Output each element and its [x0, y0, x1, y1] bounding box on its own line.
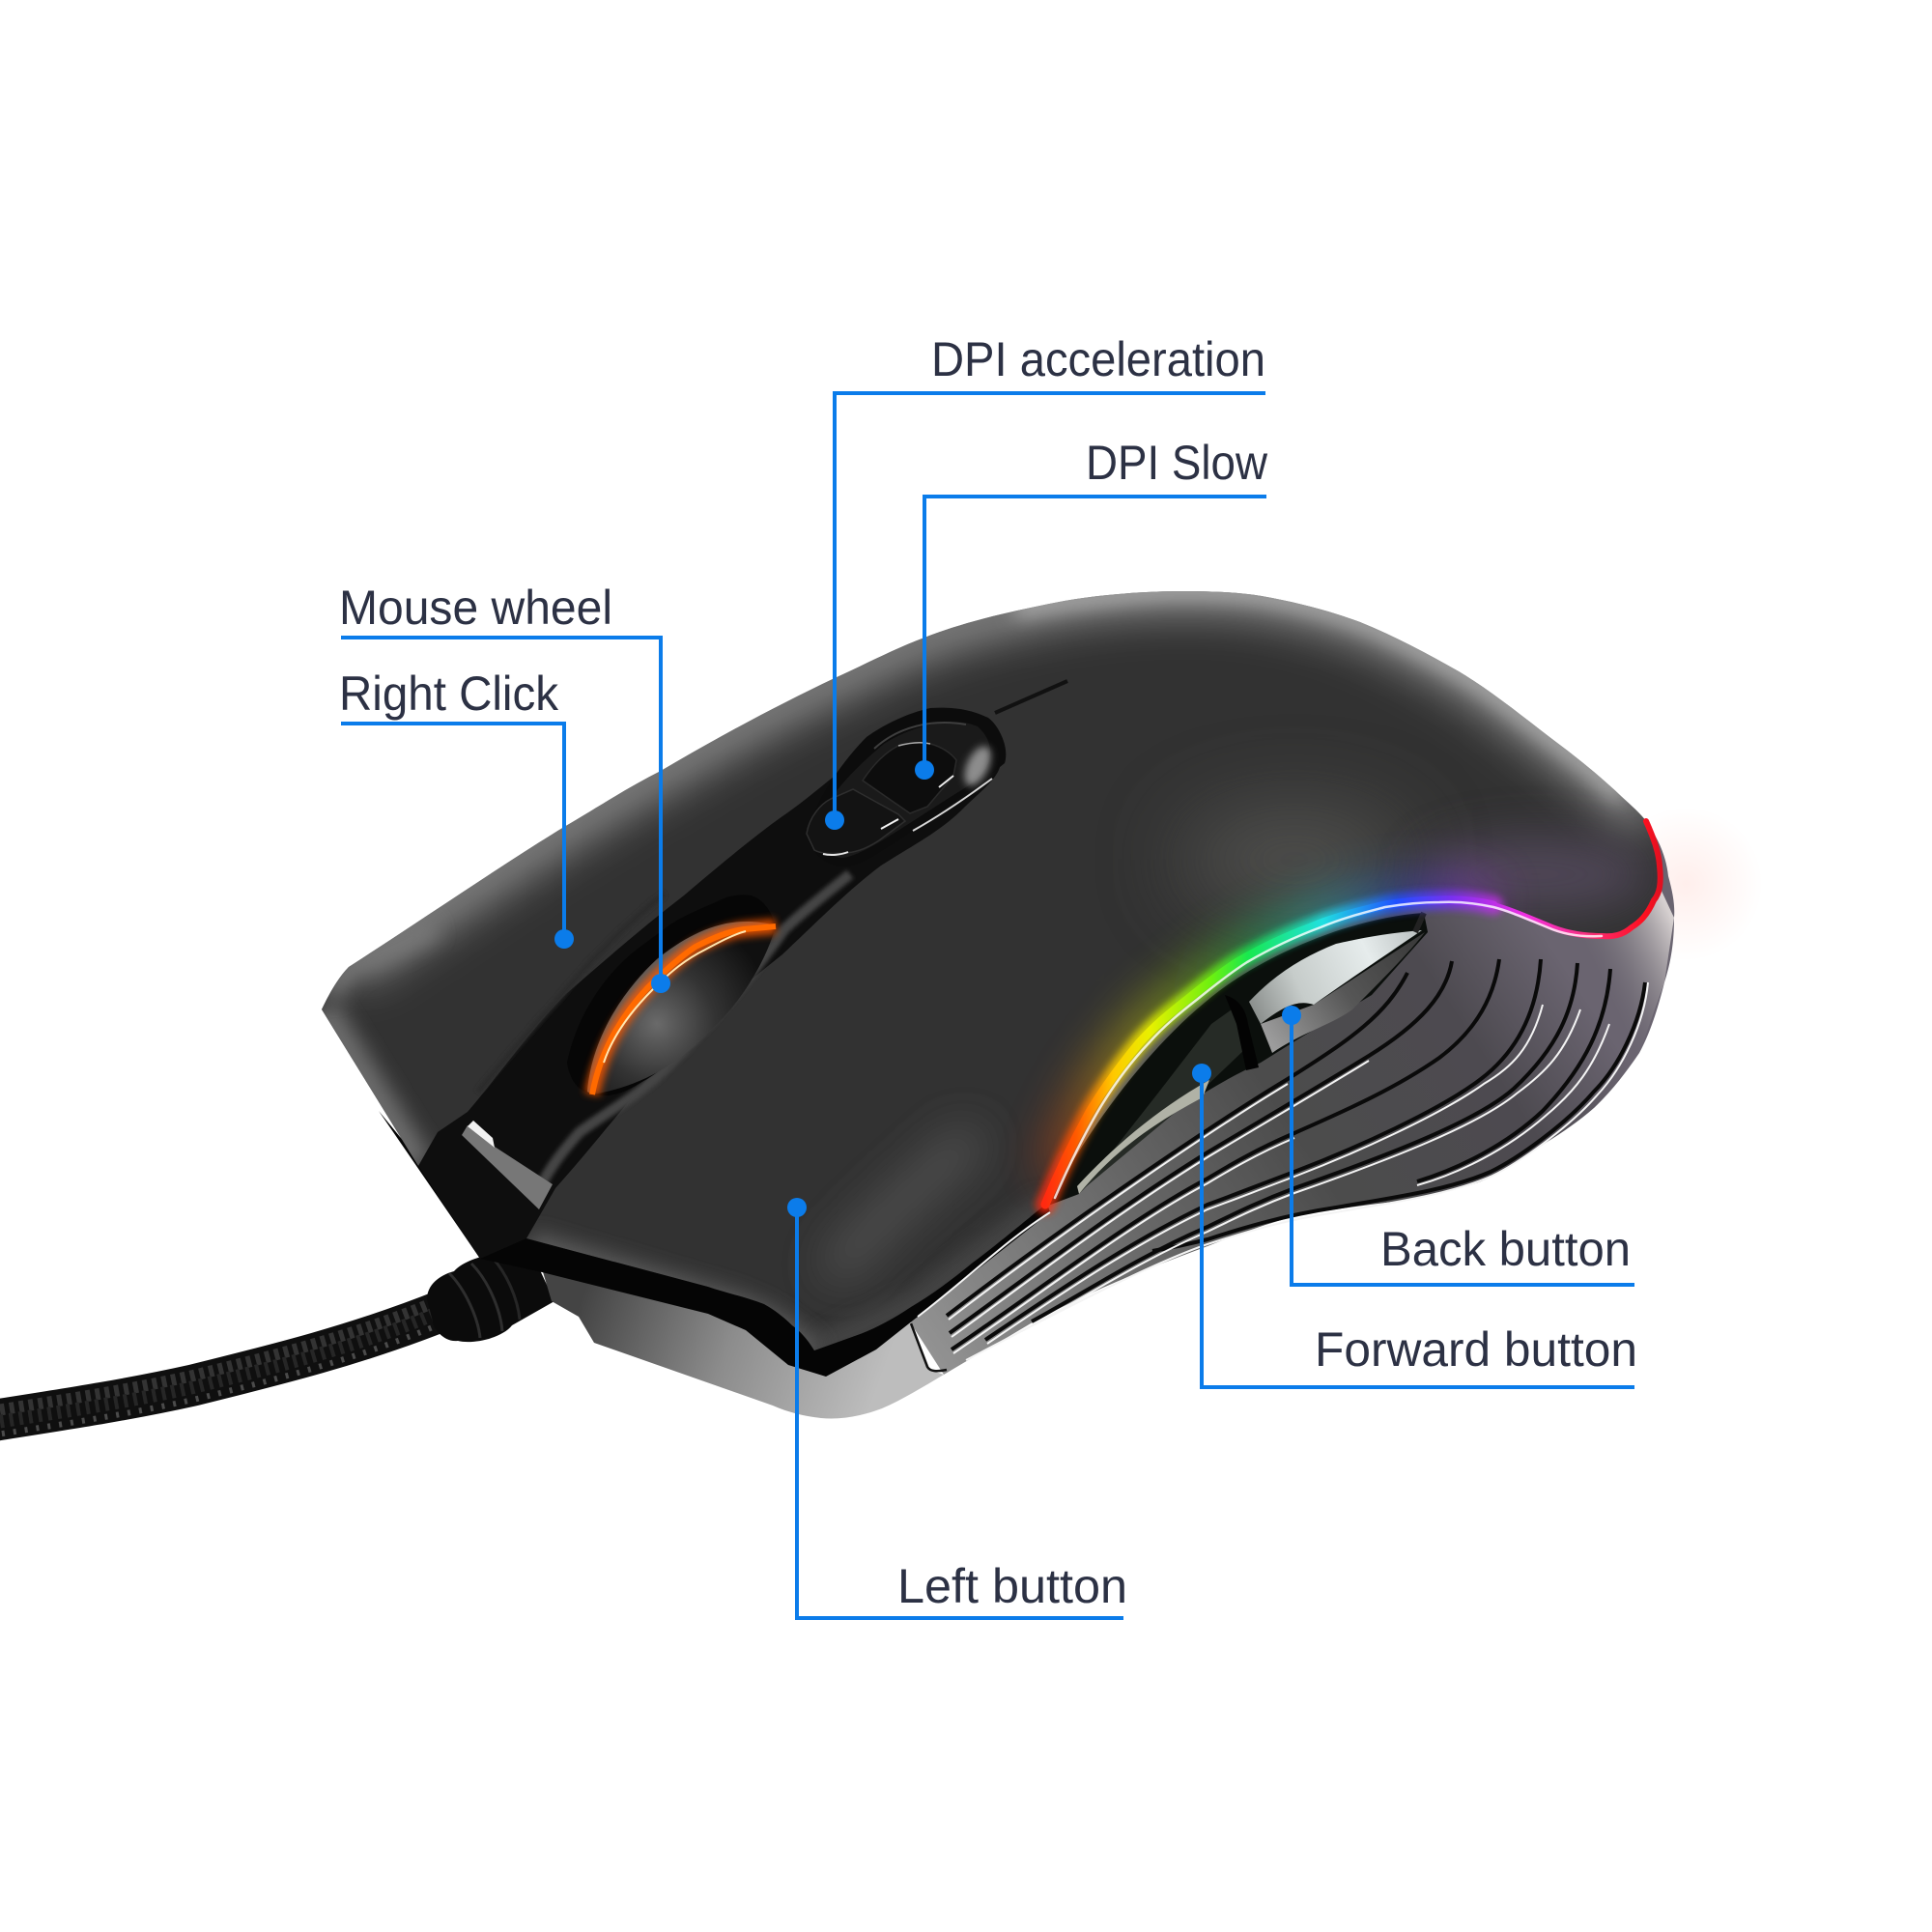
label: Left button [787, 1198, 1127, 1618]
front silver base [541, 1265, 944, 1419]
label: Mouse wheel [339, 581, 670, 993]
wheel well [567, 895, 776, 1095]
label: Right Click [339, 667, 574, 949]
rear purple haze [1420, 836, 1652, 913]
label: DPI Slow [915, 436, 1268, 780]
DPI acceleration button [807, 789, 905, 854]
side grooves black [947, 959, 1645, 1350]
DPI slow button [863, 743, 956, 813]
RGB colored glow on top shell [1063, 900, 1493, 1179]
back button and side recess [1048, 913, 1428, 1206]
side panel seam [911, 1323, 947, 1371]
left button front bevel [529, 1246, 814, 1357]
RGB light strip [1045, 821, 1661, 1205]
wheel light glow [592, 926, 776, 1094]
right button front bevel [322, 1009, 418, 1166]
top shell matte [322, 591, 1661, 1350]
body base shell [322, 591, 1674, 1375]
mouse cable [0, 1300, 444, 1435]
label: DPI acceleration: DPI acceleration [931, 332, 1265, 386]
central haze [1179, 807, 1410, 913]
label: Right Click: Right Click [339, 667, 559, 721]
top centre channel [418, 681, 1067, 1259]
label: Back button: Back button [1380, 1222, 1631, 1276]
channel sheen [537, 874, 850, 1193]
DPI well inner plate [813, 722, 990, 858]
label: DPI acceleration [825, 332, 1265, 830]
wheel body [592, 922, 776, 1094]
back button lower facet [1261, 932, 1425, 1053]
label: Forward button [1192, 1064, 1637, 1387]
mouse wheel [567, 895, 776, 1095]
black underside gap [379, 1111, 1050, 1377]
channel front glossy facet [462, 1125, 553, 1209]
pale red light glow behind mouse tail [1604, 792, 1768, 976]
mouse cable strain relief [427, 1241, 554, 1342]
mouse body [322, 591, 1674, 1419]
DPI button well [807, 708, 1006, 867]
side grooves white highlights [918, 982, 1648, 1360]
label: Left button: Left button [897, 1559, 1127, 1613]
button separator [1225, 995, 1259, 1070]
wheel upper crescent [587, 922, 776, 1094]
label: Forward button: Forward button [1315, 1322, 1637, 1377]
label: DPI Slow: DPI Slow [1086, 436, 1268, 490]
forward button sheen [1082, 1005, 1246, 1190]
top shell shading [322, 591, 1652, 1357]
label: Mouse wheel: Mouse wheel [339, 581, 612, 635]
back button silver face [1249, 930, 1422, 1024]
label: Back button [1282, 1006, 1634, 1285]
rear silver highlight [1604, 891, 1674, 1030]
